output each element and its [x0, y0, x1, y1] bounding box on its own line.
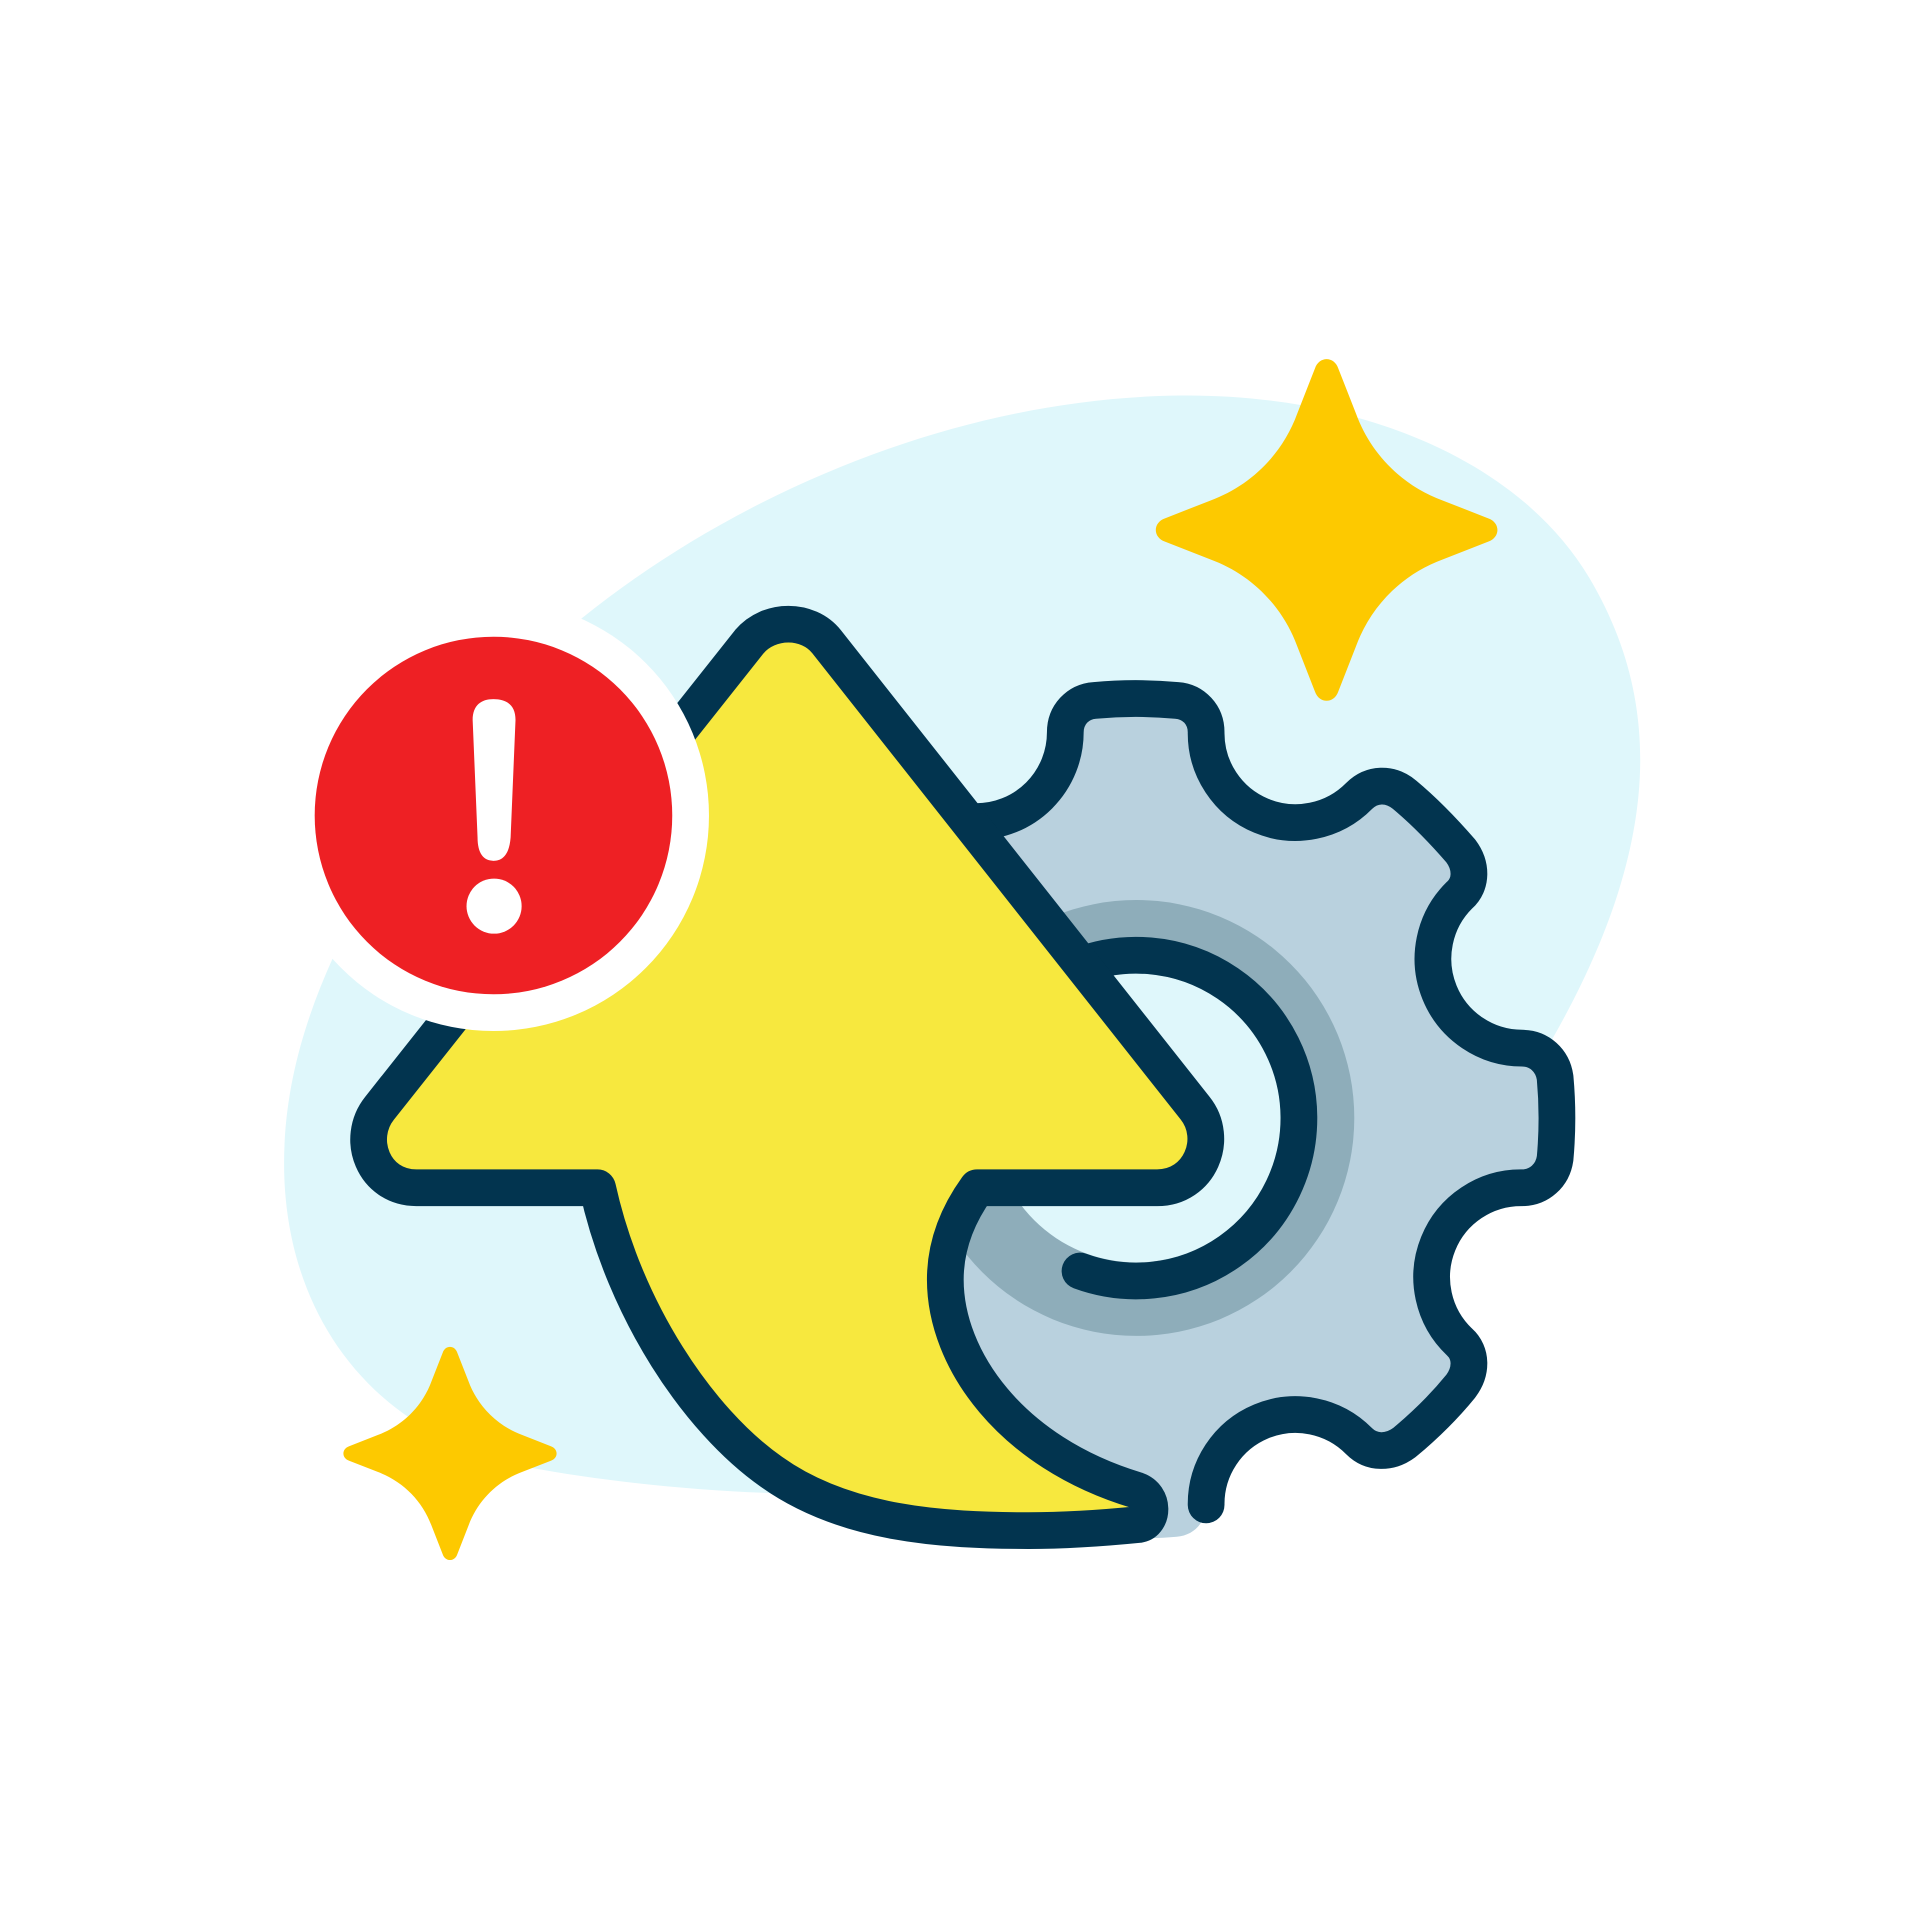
arrow: curved yellow up arrow — [369, 624, 1206, 1531]
gear hole outline — [1078, 955, 1299, 1281]
badge white border — [278, 600, 709, 1031]
gear outline — [976, 699, 1557, 1505]
gear inner ring — [918, 900, 1354, 1336]
gear hole — [992, 973, 1281, 1262]
exclamation mark dot — [467, 879, 522, 934]
exclamation mark stem — [473, 699, 516, 861]
badge red disc — [315, 637, 672, 994]
warning badge — [278, 600, 709, 1031]
icon: small sparkle — [343, 1347, 557, 1560]
background blob — [284, 395, 1640, 1494]
icon: gear — [857, 699, 1557, 1538]
icon: large sparkle — [1156, 359, 1497, 701]
gear body — [857, 699, 1557, 1538]
